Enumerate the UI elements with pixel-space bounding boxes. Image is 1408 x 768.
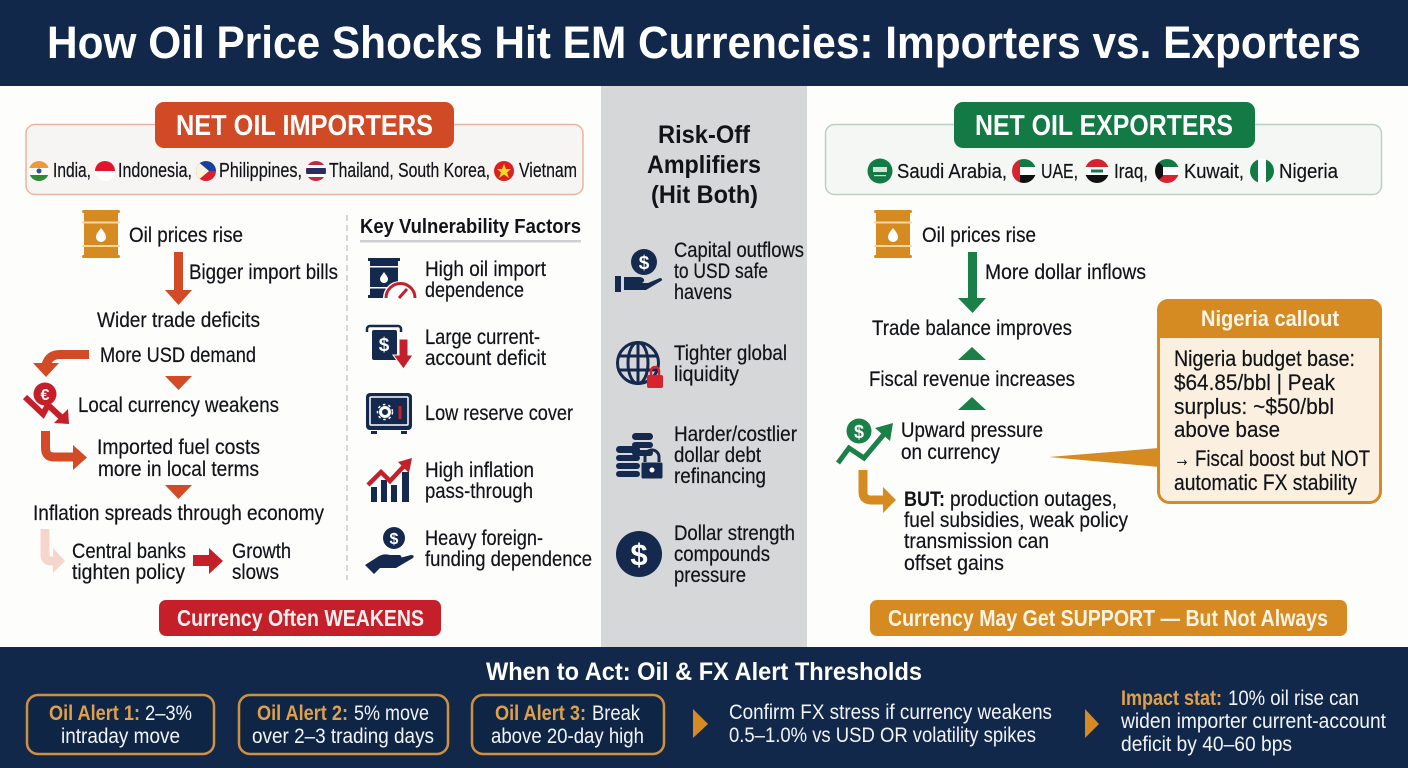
icon: hand with dollar coin (615, 249, 662, 292)
country strip: importers: Thailand, South Korea, (329, 160, 490, 182)
country strip: importers (26, 124, 583, 194)
badge: net oil exporters (954, 102, 1255, 148)
icon: hand with coin: $ (390, 531, 399, 548)
panel: net oil exporters (826, 102, 1382, 636)
text: imported fuel costs (97, 436, 260, 481)
arrow: bent left (33, 354, 89, 377)
icon: document with down arrow: $ (379, 335, 390, 356)
badge: currency may get support: Currency May Get SUPPORT — But Not Always (888, 605, 1328, 631)
arrow: green down (958, 252, 986, 313)
text: tighter global liquidity: liquidity (674, 363, 739, 386)
callout: Nigeria: Nigeria budget base: (1174, 346, 1355, 371)
icon: document with down arrow (367, 326, 413, 369)
arrow: orange bent (863, 470, 896, 513)
text: but caveat: transmission can (904, 530, 1049, 553)
alert box 2 (239, 695, 448, 754)
country strip: importers: India, (53, 160, 91, 182)
panel: key vulnerability factors (360, 216, 592, 574)
arrow: to impact stat (1085, 709, 1099, 738)
text: tighter global liquidity (674, 342, 787, 386)
text: growth slows: slows (232, 561, 279, 584)
text: upward pressure (901, 419, 1043, 464)
arrow: to growth slows (193, 548, 223, 574)
text: capital outflows: to USD safe (674, 260, 768, 283)
arrow: triangle up (958, 347, 986, 360)
callout: Nigeria: Nigeria callout (1201, 306, 1340, 331)
text: but caveat (904, 488, 1128, 575)
country strip: exporters: Kuwait, (1184, 161, 1244, 183)
text: dollar strength: compounds (674, 543, 770, 566)
text: wider trade deficits: Wider trade deficits (97, 309, 260, 332)
alert box 1 (27, 695, 214, 754)
alert box 2: Oil Alert 2: (257, 702, 348, 725)
text: high inflation pass-through: pass-through (425, 480, 533, 503)
text: large current-account deficit (425, 326, 546, 370)
flag: Philippines (196, 160, 216, 182)
country strip: importers: Indonesia, (118, 160, 192, 182)
text: but caveat: BUT: (904, 488, 945, 511)
text: dollar debt refinancing (674, 423, 797, 488)
badge: net oil exporters: NET OIL EXPORTERS (975, 110, 1233, 142)
badge: net oil importers (155, 102, 454, 148)
text: high oil import dependence: High oil import (425, 258, 546, 281)
text: oil prices rise: Oil prices rise (922, 224, 1036, 247)
callout: Nigeria: $64.85/bbl | Peak (1174, 370, 1336, 395)
text: large current-account deficit: account deficit (425, 347, 546, 370)
icon: oil barrel (82, 210, 120, 258)
text: but caveat: fuel subsidies, weak policy (904, 509, 1128, 532)
text: capital outflows: Capital outflows (674, 239, 804, 262)
text: fiscal revenue increases: Fiscal revenue increases (869, 368, 1075, 391)
text: inflation spreads: Inflation spreads through economy (33, 502, 324, 525)
text: high oil import dependence (425, 258, 546, 302)
text: impact stat: deficit by 40–60 bps (1121, 733, 1292, 756)
heading: risk-off amplifiers: (Hit Both) (651, 181, 758, 209)
text: impact stat: widen importer current-account (1120, 710, 1386, 733)
text: more dollar inflows: More dollar inflows (985, 261, 1146, 284)
flag: Kuwait (1155, 159, 1179, 183)
text: but caveat: production outages, (950, 488, 1117, 511)
text: imported fuel costs: more in local terms (98, 458, 259, 481)
text: more usd demand: More USD demand (100, 344, 256, 367)
badge: currency often weakens: Currency Often WEAKENS (177, 605, 424, 631)
flag: Iraq (1085, 159, 1109, 183)
text: high inflation pass-through: High inflation (425, 459, 534, 482)
country strip: exporters: Saudi Arabia, (897, 161, 1007, 183)
heading: risk-off amplifiers: Amplifiers (647, 151, 761, 179)
flag: Indonesia (95, 161, 115, 181)
arrow: pale bent (45, 529, 65, 573)
alert box 1: 2–3% (145, 702, 192, 725)
alert box 3 (472, 695, 664, 754)
flag: Nigeria (1250, 159, 1274, 183)
flag: Saudi Arabia (868, 158, 892, 184)
text: growth slows: Growth (232, 540, 291, 563)
country strip: exporters: Nigeria (1279, 161, 1339, 183)
country strip: importers: Philippines, (219, 160, 302, 182)
flag: Thailand (306, 161, 326, 181)
text: heavy foreign-funding dependence (425, 527, 592, 571)
icon: dollar circle (616, 531, 662, 577)
callout: Nigeria: Fiscal boost but NOT (1195, 446, 1370, 471)
text: bigger import bills: Bigger import bills (189, 261, 338, 284)
text: upward pressure: Upward pressure (901, 419, 1043, 442)
heading: risk-off amplifiers (647, 121, 761, 209)
text: heavy foreign-funding dependence: Heavy foreign- (425, 527, 543, 550)
icon: euro falling (25, 382, 69, 424)
arrow: triangle down (165, 485, 192, 499)
arrow: triangle down (165, 376, 192, 390)
arrow: to FX stress (693, 709, 708, 738)
callout pointer (1049, 448, 1159, 467)
icon: safe (366, 393, 412, 434)
title banner: How Oil Price Shocks Hit EM Currencies: Importers vs. Exporters (47, 17, 1361, 68)
text: central banks (72, 540, 186, 584)
text: dollar strength: pressure (674, 564, 746, 587)
text: impact stat: 10% oil rise can (1228, 687, 1359, 710)
badge: net oil importers: NET OIL IMPORTERS (176, 110, 433, 142)
alert box 1: Oil Alert 1: (49, 702, 140, 725)
alert box 3: Oil Alert 3: (495, 702, 586, 725)
text: high inflation pass-through (425, 459, 534, 503)
text: dollar debt refinancing: Harder/costlier (674, 423, 797, 446)
flag: UAE (1012, 159, 1036, 183)
icon: dollar circle: $ (630, 537, 648, 572)
badge: currency may get support (870, 600, 1347, 636)
arrow: triangle up (958, 397, 986, 410)
text: dollar strength (674, 522, 795, 587)
alert box 1: intraday move (61, 725, 180, 748)
text: impact stat (1120, 687, 1386, 756)
country strip: exporters: UAE, (1041, 161, 1078, 183)
icon: hand with dollar coin: $ (639, 253, 650, 274)
badge: currency often weakens (159, 600, 441, 636)
text: dollar debt refinancing: dollar debt (674, 444, 761, 467)
arrow: bent right (46, 431, 87, 470)
callout: Nigeria: surplus: ~$50/bbl (1174, 394, 1334, 419)
text: upward pressure: on currency (901, 441, 1000, 464)
alert box 3: above 20-day high (491, 725, 644, 748)
icon: euro falling: € (41, 387, 50, 404)
flag: India (29, 161, 49, 182)
icon: coins with padlock (616, 433, 663, 479)
text: dollar strength: Dollar strength (674, 522, 795, 545)
icon: oil barrel (874, 210, 912, 258)
arrow: down to trade deficits (165, 252, 192, 305)
icon: barrel with gauge (368, 258, 417, 298)
icon: dollar trend up: $ (854, 422, 864, 442)
panel: alert thresholds (0, 647, 1408, 768)
alert box 2: 5% move (354, 702, 429, 725)
text: central banks: tighten policy (72, 561, 185, 584)
text: capital outflows: havens (674, 281, 732, 304)
text: confirm fx stress (729, 701, 1052, 747)
icon: hand with coin (365, 527, 414, 574)
text: trade balance improves: Trade balance improves (872, 317, 1072, 340)
text: imported fuel costs: Imported fuel costs (97, 436, 260, 459)
text: heavy foreign-funding dependence: funding dependence (425, 548, 592, 571)
icon: dollar trend up (838, 418, 893, 463)
flag: Vietnam (494, 161, 514, 181)
text: but caveat: offset gains (904, 552, 1004, 575)
callout: Nigeria: above base (1174, 417, 1280, 442)
text: growth slows (232, 540, 291, 584)
heading: when to act: When to Act: Oil & FX Alert Thresholds (486, 658, 922, 686)
callout: Nigeria: → (1174, 446, 1190, 471)
text: impact stat: Impact stat: (1121, 687, 1222, 710)
text: oil prices rise: Oil prices rise (129, 224, 243, 247)
text: dollar debt refinancing: refinancing (674, 465, 766, 488)
text: large current-account deficit: Large current- (425, 326, 540, 349)
text: high oil import dependence: dependence (425, 279, 524, 302)
title banner (0, 0, 1408, 86)
country strip: importers: Vietnam (519, 160, 577, 182)
country strip: exporters (826, 124, 1382, 194)
text: local currency weakens: Local currency weakens (78, 394, 279, 417)
text: tighter global liquidity: Tighter global (674, 342, 787, 365)
text: capital outflows (674, 239, 804, 304)
icon: globe with lock (618, 342, 663, 388)
country strip: exporters: Iraq, (1114, 161, 1148, 183)
heading: risk-off amplifiers: Risk-Off (658, 121, 751, 149)
callout: Nigeria (1157, 299, 1382, 502)
panel: net oil importers (25, 102, 583, 636)
text: confirm fx stress: 0.5–1.0% vs USD OR volatility spikes (729, 724, 1036, 747)
callout: Nigeria: automatic FX stability (1174, 470, 1357, 495)
alert box 3: Break (592, 702, 640, 725)
icon: rising bars chart (368, 458, 412, 502)
text: central banks: Central banks (72, 540, 186, 563)
text: confirm fx stress: Confirm FX stress if currency weakens (729, 701, 1052, 724)
panel: risk-off amplifiers (601, 86, 807, 647)
text: low reserve cover: Low reserve cover (425, 402, 573, 425)
heading: key vulnerability factors: Key Vulnerability Factors (360, 216, 581, 238)
alert box 2: over 2–3 trading days (252, 725, 434, 748)
